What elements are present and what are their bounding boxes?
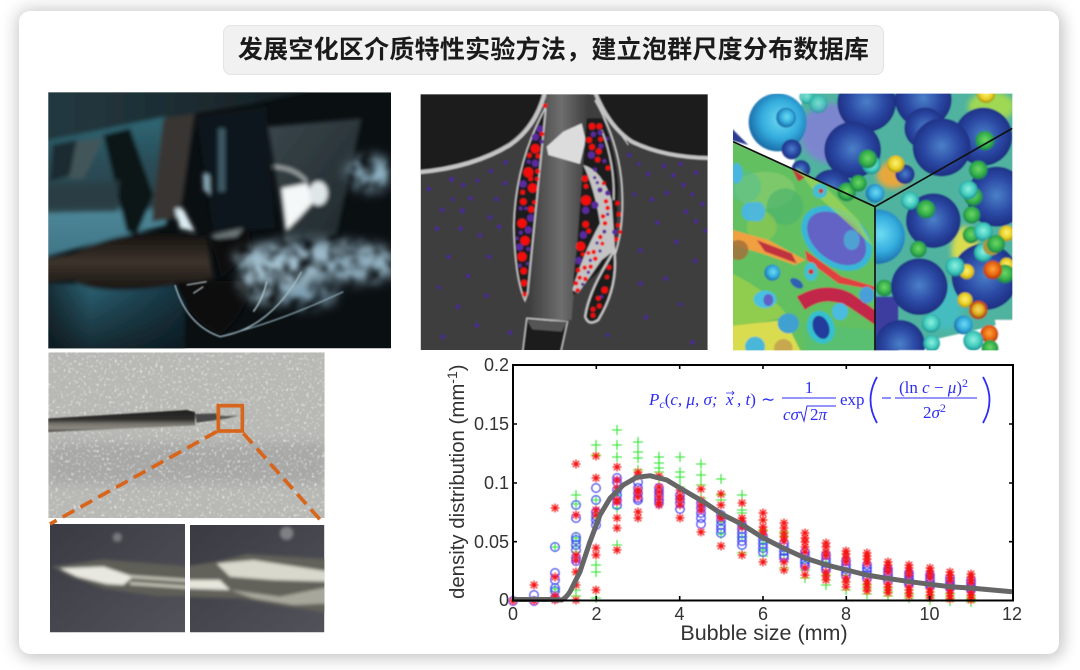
y axis label: -1 — [444, 371, 460, 384]
panel: needle probe photo with zoom insets — [40, 352, 330, 632]
right pocket upper — [573, 118, 618, 295]
bubbles inside pockets — [515, 125, 617, 298]
y axis tick labels — [474, 355, 509, 610]
back row spheres — [836, 94, 897, 132]
formula: log-normal distribution: 2 — [962, 376, 968, 390]
formula: log-normal distribution: ∼ — [761, 390, 775, 409]
formula: log-normal distribution: 2σ — [923, 403, 940, 422]
purple bubbles outside — [427, 153, 707, 345]
formula: log-normal distribution: ( — [665, 390, 671, 409]
x axis tick labels: 6 — [758, 604, 768, 624]
x axis label: Bubble size (mm) — [680, 621, 848, 645]
formula: log-normal distribution: 2 — [940, 401, 946, 415]
scatter markers — [509, 425, 976, 607]
formula: log-normal distribution: , t) — [737, 390, 756, 409]
white gaps — [994, 318, 1012, 348]
panel: 3D bubble simulation render — [733, 94, 1012, 350]
y axis label: density distribution (mm — [447, 384, 469, 599]
bottom strut — [522, 318, 568, 353]
x axis tick labels: 0 — [508, 604, 518, 624]
x axis tick labels: 12 — [1002, 604, 1022, 624]
formula: log-normal distribution: exp — [840, 390, 865, 409]
formula: log-normal distribution: (ln c − μ) — [899, 378, 962, 397]
formula: log-normal distribution — [648, 376, 990, 424]
y axis tick labels: 0.05 — [474, 532, 509, 552]
x axis tick labels: 8 — [841, 604, 851, 624]
title — [223, 25, 884, 75]
x axis tick labels: 4 — [674, 604, 685, 624]
rear coloured flow background — [793, 90, 1018, 353]
x axis tick labels: 2 — [591, 604, 602, 624]
formula: log-normal distribution: x — [725, 390, 734, 409]
cylinder — [527, 90, 590, 320]
cube edges — [733, 128, 1012, 350]
formula: log-normal distribution: P — [649, 390, 659, 409]
panel: propeller cavitation photo — [40, 85, 400, 355]
title: 发展空化区介质特性实验方法，建立泡群尺度分布数据库 — [238, 36, 869, 64]
y axis tick labels: 0 — [499, 590, 509, 610]
y axis tick labels: 0.15 — [474, 414, 509, 434]
formula: log-normal distribution: cσ — [783, 405, 800, 424]
small spheres — [895, 165, 915, 184]
y axis tick labels: 0.1 — [484, 473, 509, 493]
right-face purple and big blue at edge — [875, 297, 898, 353]
inset left — [50, 524, 190, 632]
formula: log-normal distribution: c — [659, 397, 665, 411]
y axis tick labels: 0.2 — [484, 355, 509, 375]
formula: log-normal distribution: c, μ, σ; — [670, 390, 718, 409]
bar chart: bubble size density distribution scatter with fitted curve — [444, 355, 1022, 645]
fitted log-normal curve — [513, 476, 1012, 600]
formula: log-normal distribution: 2π — [810, 405, 828, 424]
y axis label: ) — [447, 364, 469, 371]
panel: CFD simulation of cavity with bubbles — [415, 90, 715, 353]
probe photo — [40, 352, 325, 518]
left pocket — [514, 108, 546, 301]
upper dark region left — [420, 94, 543, 170]
formula: log-normal distribution: 1 — [805, 378, 813, 397]
inset right — [183, 525, 330, 632]
axes frame and ticks — [513, 365, 1013, 600]
zoom indicator box and dashed lines — [50, 406, 323, 524]
x axis tick labels — [508, 604, 1022, 624]
x axis tick labels: 10 — [919, 604, 940, 624]
left face — [725, 138, 875, 353]
upper dark region right — [593, 90, 715, 159]
